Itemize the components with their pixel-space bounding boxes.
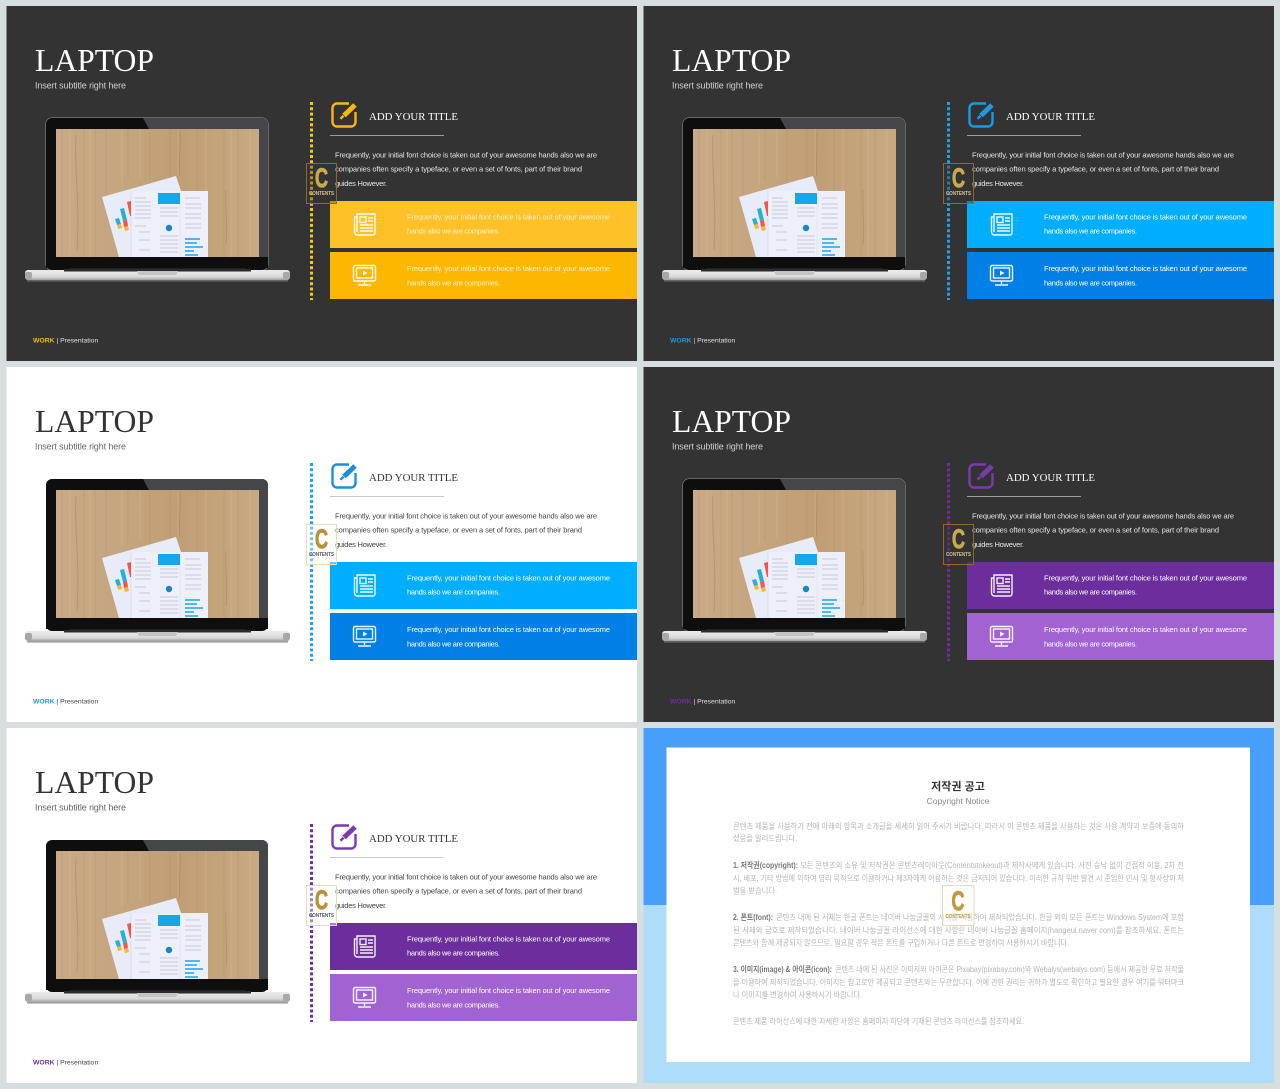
body text: Frequently, your initial font choice is taken out of your awesome hands also we are bbox=[335, 872, 597, 882]
intro paragraph: 셨음을 알려드립니다. bbox=[733, 833, 797, 843]
body text: guides However. bbox=[335, 901, 387, 910]
panel: copyright notice bbox=[644, 728, 1274, 1083]
paragraph 3: image and icon: 나 이미지를 변경하여 사용하시기 바랍니다. bbox=[733, 990, 862, 1000]
band: first feature: hands also we are companies. bbox=[407, 588, 500, 596]
paragraph 3: image and icon: 3. 이미지(image) & 아이콘(icon): bbox=[733, 964, 832, 974]
band: first feature bbox=[330, 201, 637, 248]
band: first feature: Frequently, your initial font choice is taken out of your awesome bbox=[1044, 574, 1247, 582]
footer: WORK | Presentation bbox=[33, 338, 98, 344]
band: first feature: hands also we are companies. bbox=[1044, 226, 1137, 236]
laptop illustration bbox=[662, 118, 927, 282]
paragraph 3: image and icon: 을 이용하여 제작되었습니다. 이미지는 참고로만 제공되고 콘텐츠와는 무관합니다. 이에 관한 권리는 귀하가 별도로 확인하고 필요한 경우 여기를 워터마크 bbox=[733, 977, 1184, 987]
section heading: ADD YOUR TITLE bbox=[1006, 111, 1095, 123]
footer: WORK | Presentation bbox=[33, 698, 98, 706]
laptop illustration bbox=[25, 479, 290, 643]
dotted divider bbox=[947, 102, 950, 300]
band: first feature: hands also we are companies. bbox=[407, 948, 500, 958]
band: second feature bbox=[967, 613, 1274, 660]
paragraph 3: image and icon: 콘텐츠 내에 된 사진은 이미지와 아이콘은 Pixabay(pixabay.com)와 Webalys(webalys.com) 등에서 제공한 무료 저작물 bbox=[835, 964, 1184, 974]
icon: edit bbox=[332, 104, 356, 126]
title: LAPTOP bbox=[35, 403, 154, 439]
dotted divider bbox=[310, 824, 313, 1022]
body text: guides However. bbox=[335, 179, 387, 188]
band: first feature bbox=[330, 562, 637, 609]
laptop illustration bbox=[25, 840, 290, 1004]
paragraph 1: copyright: 벌을 받습니다. bbox=[733, 886, 777, 896]
paragraph 3: image and icon bbox=[733, 964, 1184, 1000]
paragraph 2: font: 2. 폰트(font): bbox=[733, 913, 773, 922]
watermark: CONTENTS bbox=[309, 913, 335, 919]
band: second feature: Frequently, your initial font choice is taken out of your awesome bbox=[407, 986, 610, 995]
dotted divider bbox=[310, 102, 313, 300]
band: first feature bbox=[967, 201, 1274, 248]
band: second feature bbox=[967, 252, 1274, 299]
paragraph 2: font: 된 서체와 금호로 제작되었습니다. 네이버 나눔글꼴 라이선스에 대한 사항은 네이버 나눔글꼴 홈페이지(hangeul.naver.com)를 참조하세요. 폰트는 bbox=[733, 925, 1184, 935]
body text bbox=[335, 512, 597, 549]
title: LAPTOP bbox=[672, 42, 791, 78]
band: first feature: Frequently, your initial font choice is taken out of your awesome bbox=[407, 574, 610, 582]
watermark: CONTENTS bbox=[946, 191, 972, 197]
watermark: CONTENTS bbox=[946, 552, 972, 558]
heading rule bbox=[330, 496, 444, 498]
paragraph 1: copyright: 시, 배포, 기타 방법에 의하여 영리 목적으로 이용하거나 제3자에게 이용하는 것은 금지되어 있습니다. 이러한 규칙 위반 발견 시 준엄한 민사 및 형사상의 처 bbox=[733, 873, 1184, 883]
panel: slide 1 dark yellow bbox=[6, 6, 637, 361]
body text: companies often specify a typeface, or even a set of fonts, part of their brand bbox=[335, 886, 582, 896]
heading rule bbox=[967, 496, 1081, 498]
title: LAPTOP bbox=[672, 403, 791, 439]
paragraph 1: copyright: 1. 저작권(copyright): bbox=[733, 860, 798, 870]
title: LAPTOP bbox=[35, 42, 154, 78]
watermark: CONTENTS bbox=[946, 914, 971, 920]
dotted divider bbox=[310, 463, 313, 661]
laptop illustration bbox=[25, 118, 290, 282]
band: second feature: hands also we are companies. bbox=[1044, 640, 1137, 648]
notice subheading: Copyright Notice bbox=[927, 796, 990, 806]
band: second feature: hands also we are companies. bbox=[407, 640, 500, 648]
section heading: ADD YOUR TITLE bbox=[369, 833, 458, 845]
section heading: ADD YOUR TITLE bbox=[369, 472, 458, 484]
heading rule bbox=[330, 134, 444, 136]
band: first feature: hands also we are companies. bbox=[1044, 588, 1137, 596]
body text: Frequently, your initial font choice is taken out of your awesome hands also we are bbox=[972, 150, 1234, 160]
band: first feature: hands also we are companies. bbox=[407, 226, 500, 236]
icon: edit bbox=[332, 826, 356, 848]
band: first feature: Frequently, your initial font choice is taken out of your awesome bbox=[407, 212, 610, 222]
icon: edit bbox=[332, 464, 356, 488]
paragraph 2: font: 콘텐츠 내에 된 서체는 한글 폰트는 네이버 나눔글꼴의 서체를 사용하여 제작되었습니다. 한글 외의 모든 폰트는 Windows System에 포함 bbox=[776, 912, 1185, 922]
watermark: CONTENTS bbox=[309, 191, 335, 197]
watermark bbox=[306, 885, 336, 926]
laptop illustration bbox=[662, 479, 927, 643]
watermark: C bbox=[315, 163, 328, 193]
band: first feature: Frequently, your initial font choice is taken out of your awesome bbox=[407, 934, 610, 944]
dotted divider bbox=[947, 463, 950, 661]
body text bbox=[335, 150, 597, 188]
closing line: 콘텐츠 제품 라이선스에 대한 자세한 사항은 홈페이지 하단에 기재된 콘텐츠 라이선스를 참조하세요. bbox=[733, 1016, 1024, 1026]
body text: guides However. bbox=[972, 179, 1024, 188]
body text: Frequently, your initial font choice is taken out of your awesome hands also we are bbox=[335, 150, 597, 160]
heading rule bbox=[967, 134, 1081, 136]
band: second feature: Frequently, your initial font choice is taken out of your awesome bbox=[1044, 264, 1247, 273]
body text: companies often specify a typeface, or even a set of fonts, part of their brand bbox=[335, 164, 582, 174]
section heading: ADD YOUR TITLE bbox=[1006, 472, 1095, 484]
band: first feature: Frequently, your initial font choice is taken out of your awesome bbox=[1044, 212, 1247, 222]
watermark: C bbox=[315, 885, 328, 915]
band: second feature: hands also we are companies. bbox=[1044, 278, 1137, 288]
band: second feature bbox=[330, 252, 637, 299]
body text bbox=[972, 512, 1234, 549]
title: LAPTOP bbox=[35, 764, 154, 800]
footer: WORK | Presentation bbox=[670, 698, 735, 706]
band: first feature bbox=[330, 923, 637, 970]
band: second feature bbox=[330, 613, 637, 660]
footer: WORK | Presentation bbox=[33, 1060, 98, 1066]
intro paragraph bbox=[733, 821, 1185, 843]
body text bbox=[972, 150, 1234, 188]
paragraph 2: font: 콘텐츠와 함께 제공되지 않으므로, 필요할 경우 적은 폰트를 구입하거나 다른 폰트로 변경하여 사용하시기 바랍니다. bbox=[733, 938, 1069, 948]
panel: slide 4 dark purple bbox=[644, 367, 1274, 722]
subtitle: Insert subtitle right here bbox=[35, 442, 126, 452]
watermark bbox=[944, 163, 974, 204]
body text: companies often specify a typeface, or even a set of fonts, part of their brand bbox=[972, 164, 1219, 174]
band: first feature bbox=[967, 562, 1274, 609]
notice heading: 저작권 공고 bbox=[931, 779, 985, 793]
icon: edit bbox=[970, 104, 992, 126]
band: second feature: hands also we are companies. bbox=[407, 278, 500, 288]
watermark bbox=[306, 163, 336, 204]
body text: guides However. bbox=[335, 540, 387, 549]
band: second feature bbox=[330, 974, 637, 1021]
band: second feature: Frequently, your initial font choice is taken out of your awesome bbox=[1044, 625, 1247, 634]
subtitle: Insert subtitle right here bbox=[35, 802, 126, 812]
watermark: CONTENTS bbox=[309, 552, 335, 558]
icon: edit bbox=[970, 464, 992, 488]
watermark: C bbox=[952, 524, 965, 554]
heading rule bbox=[330, 856, 444, 858]
band: second feature: hands also we are companies. bbox=[407, 1000, 500, 1010]
watermark bbox=[306, 524, 336, 564]
subtitle: Insert subtitle right here bbox=[35, 80, 126, 90]
panel: slide 2 dark blue bbox=[644, 6, 1274, 361]
watermark: C bbox=[952, 886, 964, 916]
subtitle: Insert subtitle right here bbox=[672, 80, 763, 90]
panel: slide 5 white purple bbox=[6, 728, 637, 1083]
paragraph 1: copyright: 모든 콘텐츠의 소유 및 저작권은 콘텐츠레이아웃(Contentstokeout)과 제작사에게 있습니다. 사전 승낙 없이 간접적 이용, 2차 전 bbox=[800, 860, 1184, 870]
paragraph 2: font bbox=[733, 912, 1185, 948]
panel: slide 3 white blue bbox=[6, 367, 637, 722]
footer: WORK | Presentation bbox=[670, 338, 735, 344]
subtitle: Insert subtitle right here bbox=[672, 442, 763, 452]
body text bbox=[335, 872, 597, 910]
band: second feature: Frequently, your initial font choice is taken out of your awesome bbox=[407, 625, 610, 634]
intro paragraph: 콘텐츠 제품을 사용하기 전에 아래의 항목과 소개글을 세세히 읽어 주시기 바랍니다. 따라서 이 콘텐츠 제품을 사용하는 것은 사용 계약과 보증에 동의하 bbox=[733, 821, 1185, 831]
paragraph 1: copyright bbox=[733, 860, 1184, 896]
body text: guides However. bbox=[972, 540, 1024, 549]
watermark bbox=[942, 886, 974, 926]
body text: Frequently, your initial font choice is taken out of your awesome hands also we are bbox=[335, 512, 597, 520]
body text: companies often specify a typeface, or even a set of fonts, part of their brand bbox=[972, 526, 1219, 534]
section heading: ADD YOUR TITLE bbox=[369, 111, 458, 123]
body text: companies often specify a typeface, or even a set of fonts, part of their brand bbox=[335, 526, 582, 534]
watermark: C bbox=[315, 524, 328, 554]
band: second feature: Frequently, your initial font choice is taken out of your awesome bbox=[407, 264, 610, 273]
body text: Frequently, your initial font choice is taken out of your awesome hands also we are bbox=[972, 512, 1234, 520]
watermark bbox=[944, 524, 974, 564]
watermark: C bbox=[952, 163, 965, 193]
